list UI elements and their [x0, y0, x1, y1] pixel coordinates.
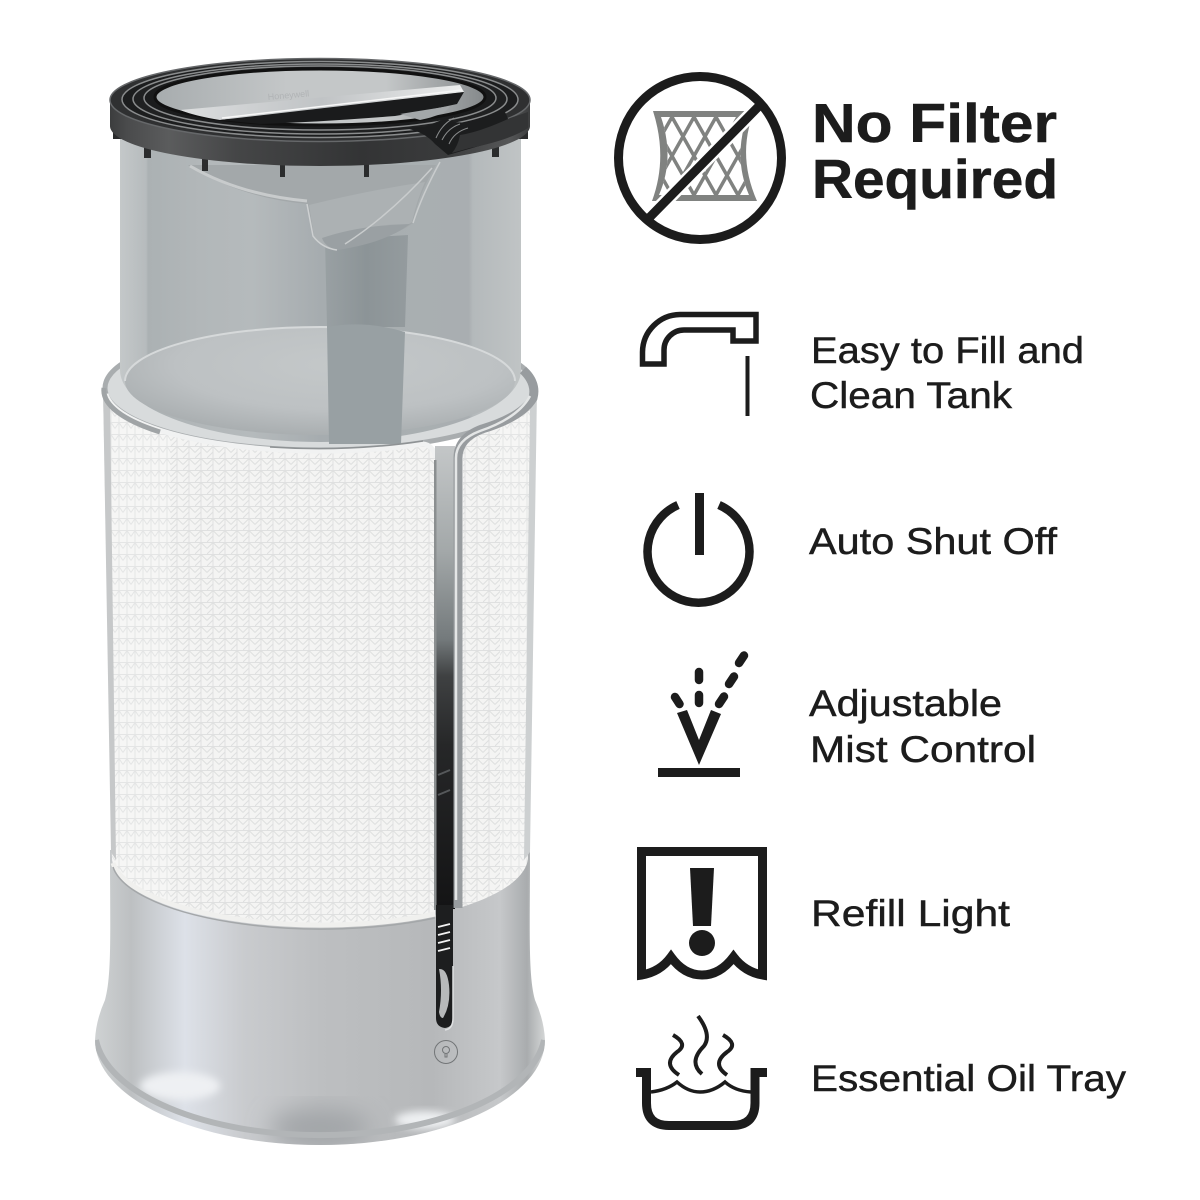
textured white body panel, right	[462, 410, 530, 907]
label: refill light: Refill Light	[811, 893, 1011, 934]
label: easy to fill: Clean Tank	[810, 375, 1013, 416]
label: auto shut off: Auto Shut Off	[809, 521, 1058, 562]
heading: no filter required	[812, 92, 1058, 210]
heading: no filter required: No Filter	[812, 92, 1057, 154]
chrome strip	[456, 370, 534, 908]
funnel under lid	[188, 162, 440, 250]
front rim of body	[106, 394, 436, 458]
icon: no filter	[606, 76, 782, 240]
silver base	[95, 850, 545, 1148]
rim shadow line	[104, 388, 160, 432]
lid handle	[180, 85, 464, 120]
control slot in body	[434, 446, 455, 910]
translucent outer edges of body	[103, 388, 537, 860]
label: adjustable mist control	[809, 683, 1036, 770]
rim front shadow	[270, 441, 423, 449]
icon: power button	[648, 493, 750, 603]
label: adjustable mist control: Mist Control	[810, 729, 1036, 770]
transparent water tank	[120, 125, 521, 442]
icon: essential oil tray	[636, 1016, 767, 1126]
tank floor disc	[125, 327, 515, 435]
lid notch	[405, 112, 509, 155]
label: easy to fill	[810, 330, 1084, 416]
icon: adjustable mist	[658, 656, 744, 777]
label: essential oil tray: Essential Oil Tray	[811, 1058, 1127, 1099]
label: easy to fill: Easy to Fill and	[811, 330, 1084, 371]
icon: water faucet	[642, 314, 756, 416]
dial wheel	[439, 969, 449, 1018]
dark ribbed lid	[110, 58, 530, 166]
lid underside tabs	[113, 128, 528, 177]
brand mark on handle: Honeywell	[267, 88, 310, 102]
label: adjustable mist control: Adjustable	[809, 683, 1002, 724]
icon: refill warning	[642, 852, 762, 975]
inner body well behind the tank	[105, 326, 535, 450]
light button	[434, 1040, 458, 1064]
centre tube inside tank	[325, 235, 408, 444]
humidifier product illustration	[95, 58, 545, 1148]
dial slider slot	[436, 905, 453, 1030]
textured white body panel, left	[100, 380, 440, 940]
heading: no filter required: Required	[812, 148, 1058, 210]
